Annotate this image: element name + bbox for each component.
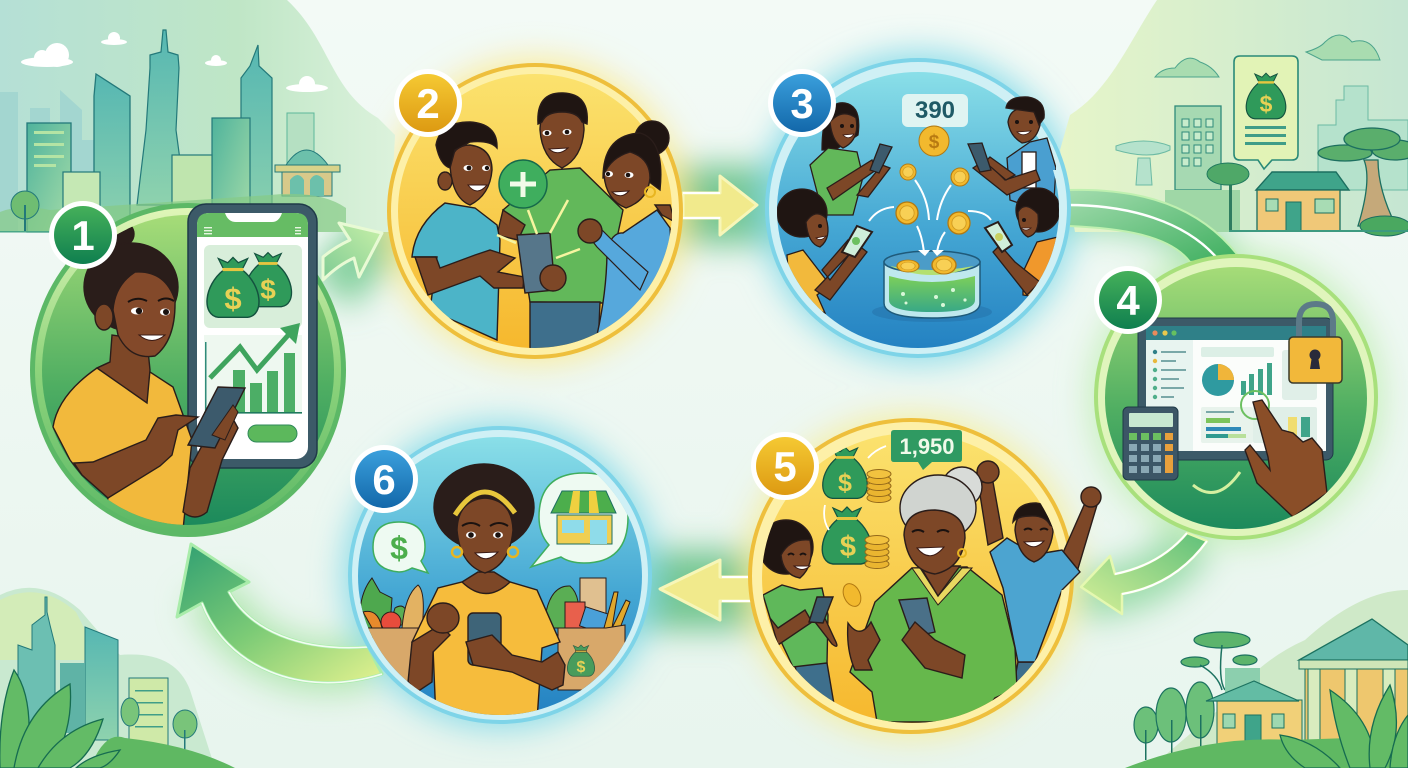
panel 2: friends joining with phone [387, 63, 683, 359]
collection tank [872, 251, 992, 322]
boy cheering [1013, 661, 1035, 686]
phone mockup [188, 204, 317, 468]
badge 1: 1 [71, 212, 95, 259]
money bags and coin stacks [822, 446, 891, 609]
amount bubble 390: $ [929, 132, 940, 153]
grandmother [945, 466, 983, 502]
decorative glow bands and halos [210, 51, 1383, 738]
woman figure [53, 222, 245, 530]
amount bubble 1,950: 1,950 [899, 434, 955, 459]
girl in green [794, 662, 834, 702]
badge 1 [49, 201, 117, 269]
arrow: step 5 to step 6 [660, 560, 752, 620]
badge 4: 4 [1116, 277, 1140, 324]
panel 5: payout celebration [748, 418, 1101, 734]
grocery box right: $ [577, 659, 586, 676]
arrow: step 1 to step 2 [323, 223, 382, 280]
panel 4: dashboard and security [1094, 254, 1378, 540]
man top right [1006, 137, 1056, 203]
woman figure [408, 464, 565, 720]
badge 4 [1094, 266, 1162, 334]
arrow: step 3 to step 4 [1068, 190, 1240, 262]
tablet dashboard [1138, 318, 1333, 460]
hand tapping [1241, 391, 1327, 517]
panel 1: woman with savings app [30, 203, 346, 537]
scene: top-right town with savings sign: $ [1260, 91, 1273, 117]
money bags and coin stacks: $ [838, 469, 852, 497]
dollar speech bubble [373, 522, 428, 573]
amount bubble 390: 390 [915, 97, 955, 124]
grocery box right [546, 578, 630, 690]
person bottom right [1023, 237, 1058, 300]
arrow: step 4 to step 5 [1081, 533, 1207, 614]
badge 5: 5 [773, 443, 797, 490]
scene: bottom-left city and leaves [0, 588, 235, 768]
person bottom left [787, 250, 830, 313]
calculator [1123, 407, 1178, 480]
money bags and coin stacks: $ [840, 531, 856, 563]
phone mockup: $ [260, 274, 276, 305]
phone mockup: $ [224, 281, 242, 316]
badge 3 [768, 69, 836, 137]
badge 3: 3 [790, 80, 814, 127]
plus icon [499, 160, 547, 208]
arrow: step 6 back to step 1 [177, 544, 382, 683]
arrow: step 2 to step 3 [683, 176, 757, 235]
dollar speech bubble: $ [390, 530, 408, 566]
amount bubble 1,950 [891, 430, 962, 470]
store speech bubble [531, 473, 628, 567]
panel 3: pooling coins [765, 58, 1071, 358]
man in green [503, 168, 623, 303]
badge 6: 6 [372, 456, 396, 503]
woman top left [822, 103, 859, 150]
groceries left [360, 578, 423, 693]
boy in teal [412, 203, 500, 340]
padlock [1289, 304, 1342, 383]
scene: bottom-right town and bank [1125, 590, 1408, 768]
badge 5 [751, 432, 819, 500]
badge 2 [394, 69, 462, 137]
woman in blue [635, 121, 669, 155]
amount bubble 390 [902, 94, 968, 156]
badge 2: 2 [416, 80, 440, 127]
cheering boy arm overflowing the ring [1062, 487, 1101, 572]
scene: top-right town with savings sign [1060, 0, 1408, 236]
scene: top-left city skyline [0, 0, 395, 232]
panel 6: spending at the market [348, 426, 652, 724]
badge 6 [350, 445, 418, 513]
